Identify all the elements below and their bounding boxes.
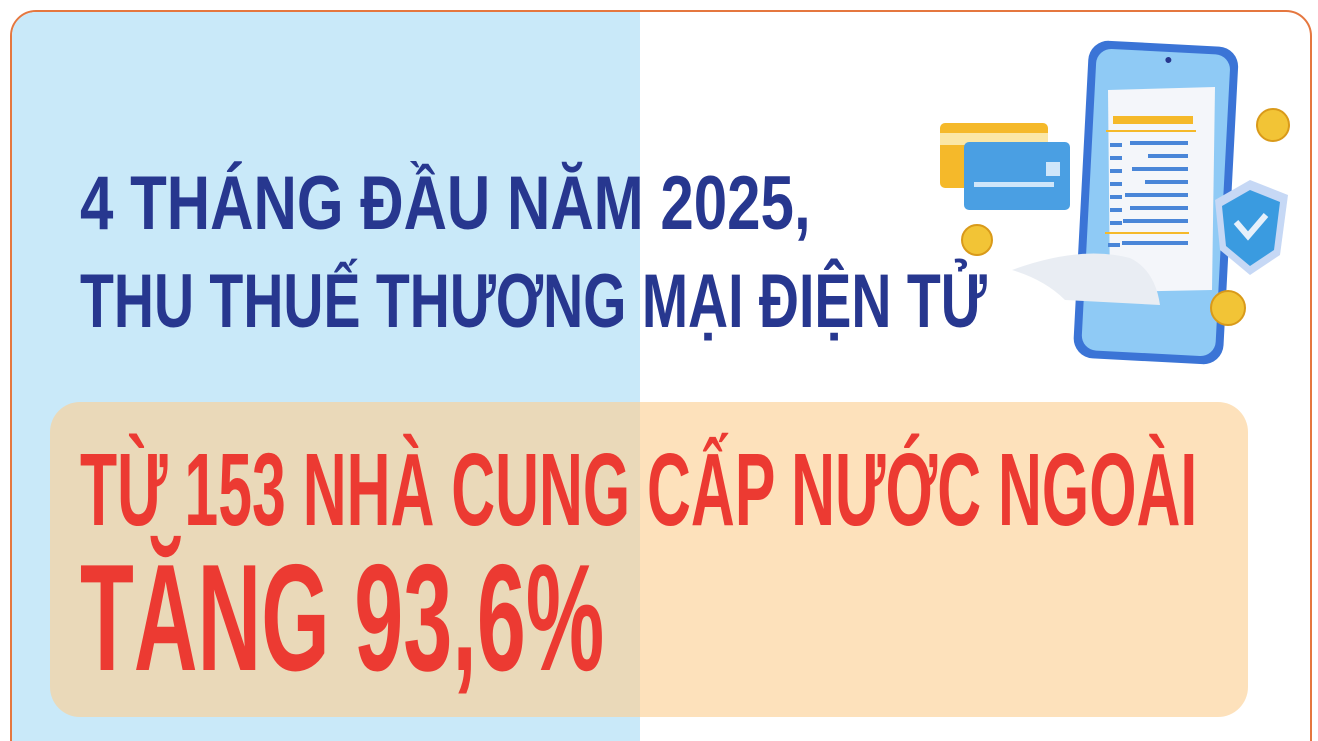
highlight line 2: TĂNG 93,6%	[80, 533, 604, 703]
highlight box	[50, 402, 1248, 717]
receipt	[1012, 87, 1215, 305]
title line 2: THU THUẾ THƯƠNG MẠI ĐIỆN TỬ	[80, 259, 987, 344]
cards	[940, 123, 1070, 210]
shield	[1215, 180, 1288, 275]
left blue panel	[12, 12, 640, 741]
highlight line 1: TỪ 153 NHÀ CUNG CẤP NƯỚC NGOÀI	[80, 432, 1197, 547]
title line 1: 4 THÁNG ĐẦU NĂM 2025,	[80, 161, 811, 246]
coins	[962, 109, 1289, 325]
phone	[1073, 40, 1239, 365]
illustration: phone with receipt	[940, 40, 1290, 364]
